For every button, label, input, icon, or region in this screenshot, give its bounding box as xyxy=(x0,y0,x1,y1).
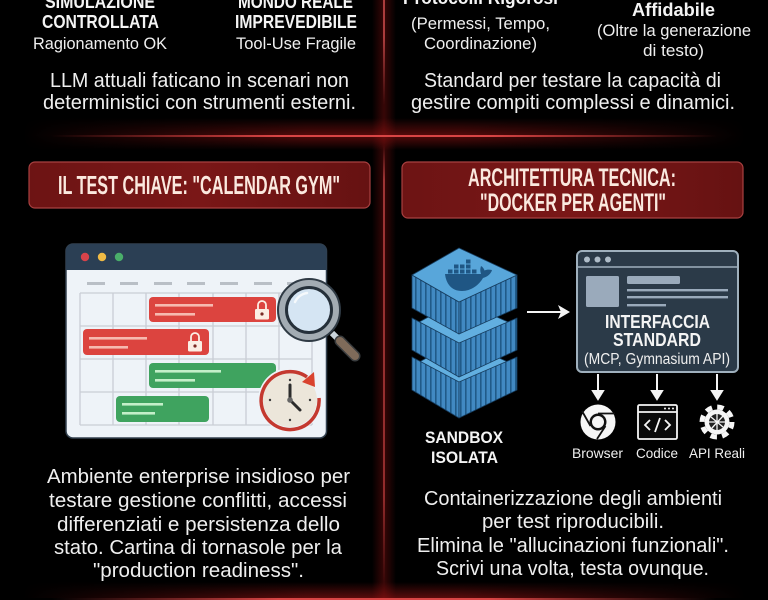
label: protocolli rigorosi: (Permessi, Tempo, xyxy=(411,14,550,33)
text: docker description: Scrivi una volta, testa ovunque. xyxy=(436,558,709,580)
label: simulazione controllata xyxy=(33,0,168,53)
illustration: calendar window xyxy=(66,244,326,438)
event: green bar xyxy=(116,396,209,422)
text: calendar gym description: testare gestione conflitti, accessi xyxy=(49,490,347,512)
container: top with whale xyxy=(412,248,517,334)
illustration: docker container stack xyxy=(412,248,517,418)
panel: standard interface window: STANDARD xyxy=(613,330,701,350)
bottom divider xyxy=(0,582,768,600)
label: mondo reale imprevedibile: Tool-Use Fragile xyxy=(236,34,356,53)
text: calendar gym description: differenziati e persistenza dello xyxy=(57,514,340,536)
panel: standard interface window: (MCP, Gymnasium API) xyxy=(584,351,730,368)
text: LLM summary: deterministici con strumenti esterni. xyxy=(43,91,356,114)
label: affidabile xyxy=(597,0,751,60)
label: protocolli rigorosi: Coordinazione) xyxy=(424,34,537,53)
container: middle xyxy=(412,300,517,377)
label: mondo reale imprevedibile: IMPREVEDIBILE xyxy=(235,12,357,32)
text: standard summary: Standard per testare la capacità di xyxy=(424,69,721,92)
text: LLM summary: LLM attuali faticano in scenari non xyxy=(50,69,349,92)
icon: api gear xyxy=(702,407,732,437)
vertical divider xyxy=(372,0,396,600)
icon: clock with arrow xyxy=(258,368,322,432)
text: standard summary xyxy=(411,69,735,114)
panel: top right criteria xyxy=(403,0,751,114)
icon: browser xyxy=(580,404,616,440)
container: bottom xyxy=(412,340,517,418)
labels: tool names: Codice xyxy=(636,445,678,461)
event: green bar xyxy=(149,363,276,388)
text: LLM summary xyxy=(43,69,356,114)
horizontal divider xyxy=(0,118,768,150)
event: red bar with lock xyxy=(83,329,209,355)
label: simulazione controllata: Ragionamento OK xyxy=(33,34,168,53)
heading: architettura tecnica: "DOCKER PER AGENTI" xyxy=(480,189,666,217)
text: calendar gym description: "production readiness". xyxy=(93,560,304,582)
labels: tool names xyxy=(572,445,745,461)
text: calendar gym description: Ambiente enterprise insidioso per xyxy=(47,466,350,488)
text: docker description: Containerizzazione degli ambienti xyxy=(424,488,722,510)
text: docker description: Elimina le "allucinazioni funzionali". xyxy=(417,535,729,557)
event: red bar with lock xyxy=(149,297,276,322)
text: docker description: per test riproducibili. xyxy=(482,511,664,533)
label: sandbox isolata: ISOLATA xyxy=(431,448,498,467)
heading: architettura tecnica xyxy=(402,162,743,218)
heading: calendar gym: IL TEST CHIAVE: "CALENDAR GYM" xyxy=(58,170,340,200)
panel: standard interface window xyxy=(577,251,738,372)
label: protocolli rigorosi xyxy=(403,0,558,53)
labels: tool names: API Reali xyxy=(689,445,745,461)
text: docker description xyxy=(417,488,729,580)
panel: top left comparison xyxy=(33,0,357,114)
label: affidabile: (Oltre la generazione xyxy=(597,21,751,40)
heading: calendar gym xyxy=(29,162,370,208)
labels: tool names: Browser xyxy=(572,445,623,461)
text: calendar gym description: stato. Cartina di tornasole per la xyxy=(54,537,343,559)
label: simulazione controllata: CONTROLLATA xyxy=(42,12,159,32)
text: calendar gym description xyxy=(47,466,350,582)
label: sandbox isolata: SANDBOX xyxy=(425,428,504,447)
icon: magnifying glass xyxy=(278,279,355,356)
arrows: interface to tools xyxy=(593,374,722,399)
label: mondo reale imprevedibile xyxy=(235,0,357,53)
text: standard summary: gestire compiti complessi e dinamici. xyxy=(411,91,735,114)
icon: code xyxy=(638,405,677,439)
panel: standard interface window: INTERFACCIA xyxy=(605,312,710,332)
label: affidabile: di testo) xyxy=(643,41,704,60)
label: affidabile: Affidabile xyxy=(632,0,715,20)
label: sandbox isolata xyxy=(425,428,504,467)
arrow: sandbox to interface xyxy=(527,305,570,319)
